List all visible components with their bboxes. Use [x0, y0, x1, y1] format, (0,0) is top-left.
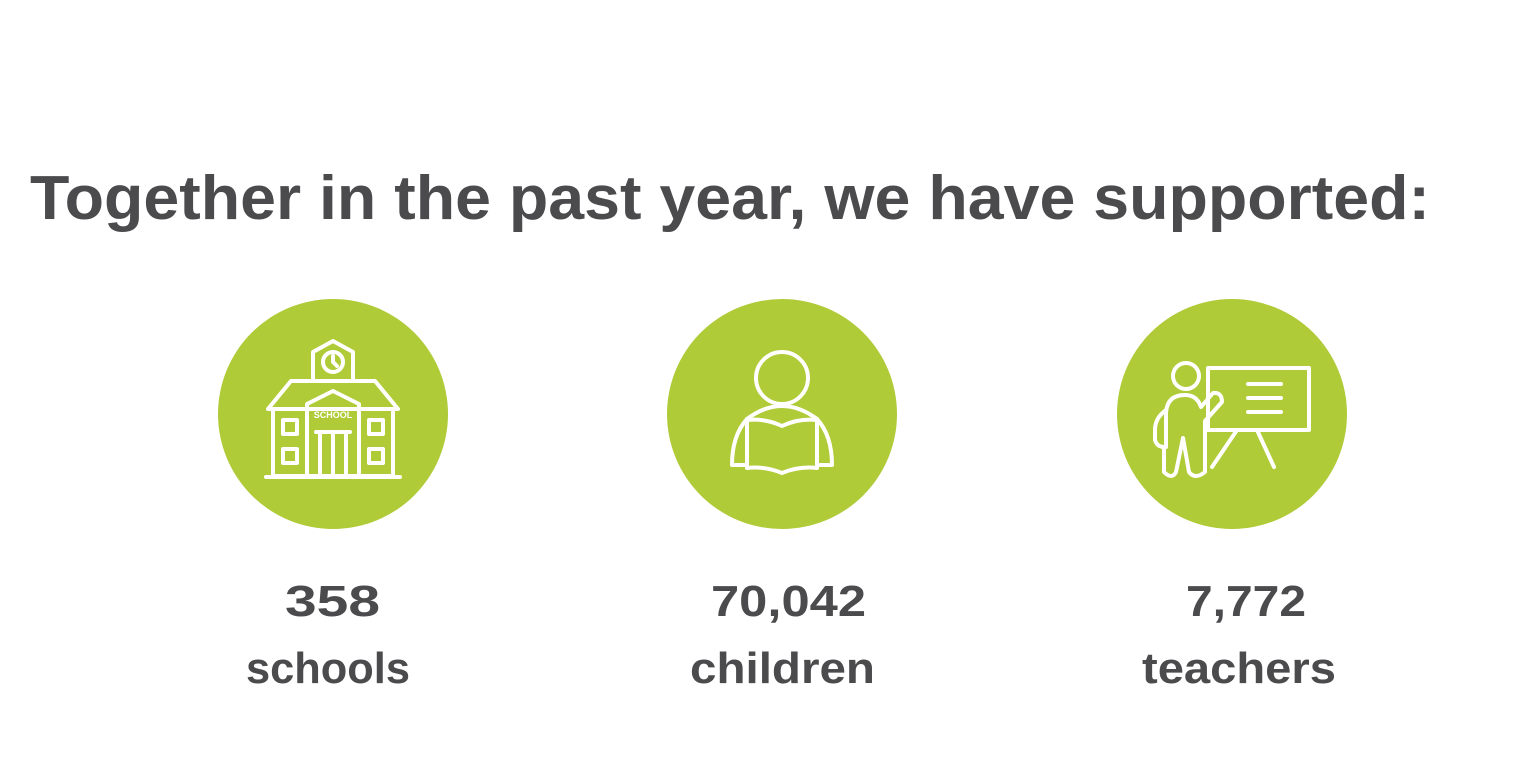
icon: child reading: [667, 299, 897, 529]
panel: teachers: [1117, 299, 1347, 693]
stat: teachers: [1142, 577, 1336, 693]
stat: children: children: [690, 644, 875, 693]
stat: children: 70,042: [711, 577, 866, 626]
stat: children: [690, 577, 875, 693]
stat: teachers: 7,772: [1186, 577, 1306, 626]
panel: schools: [218, 299, 448, 693]
stat: schools: [246, 577, 410, 693]
stat: teachers: teachers: [1142, 644, 1336, 693]
stat: schools: schools: [246, 644, 410, 693]
panel: children: [667, 299, 897, 693]
title: Together in the past year, we have supported:: [30, 164, 1430, 233]
icon: school: SCHOOL: [314, 410, 353, 420]
icon: teacher: [1117, 299, 1347, 529]
stat: schools: 358: [285, 577, 380, 626]
icon: school: [218, 299, 448, 529]
